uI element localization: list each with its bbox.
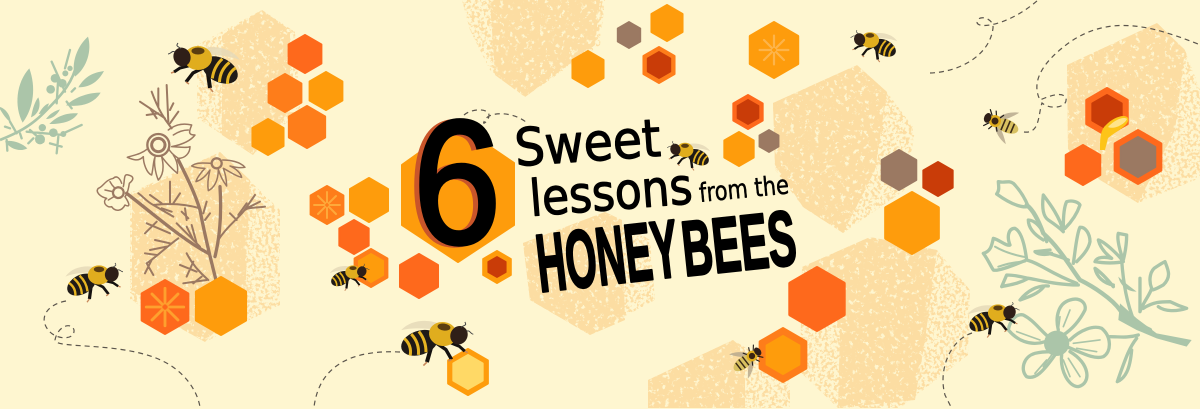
bee: bottom centre, top view — [725, 338, 770, 382]
chamomile plant — [97, 85, 265, 283]
bee: beside Sweet — [667, 141, 712, 170]
hexagons: top centre — [572, 5, 798, 166]
title: lessons: lessons — [527, 157, 694, 228]
bee: by left hexagons — [329, 264, 370, 291]
hexagon cluster: top left — [252, 35, 342, 155]
honey hexagons with drip — [1066, 88, 1161, 185]
title: Sweet: Sweet — [513, 109, 663, 179]
hexagons: plant base — [142, 278, 246, 334]
bee: above blossom — [966, 302, 1020, 337]
title badge hexagon — [402, 125, 514, 262]
hexagons: left of title — [311, 178, 511, 298]
title: from the: from the — [698, 170, 790, 209]
sage blossom branch — [983, 182, 1192, 387]
bee: top left — [168, 43, 242, 92]
title: BEES: BEES — [678, 193, 800, 293]
sage leaf sprig — [0, 37, 104, 153]
hexagons: right of title — [448, 150, 953, 395]
bee: small top right, top view — [978, 101, 1025, 146]
bee: lower left — [63, 263, 123, 302]
title: HONEY: HONEY — [532, 203, 683, 310]
numeral 6: 6 — [408, 86, 496, 282]
bee: on pale hexagon — [394, 313, 475, 372]
numeral 6: 6 — [413, 85, 501, 281]
bee: top right — [850, 30, 899, 62]
